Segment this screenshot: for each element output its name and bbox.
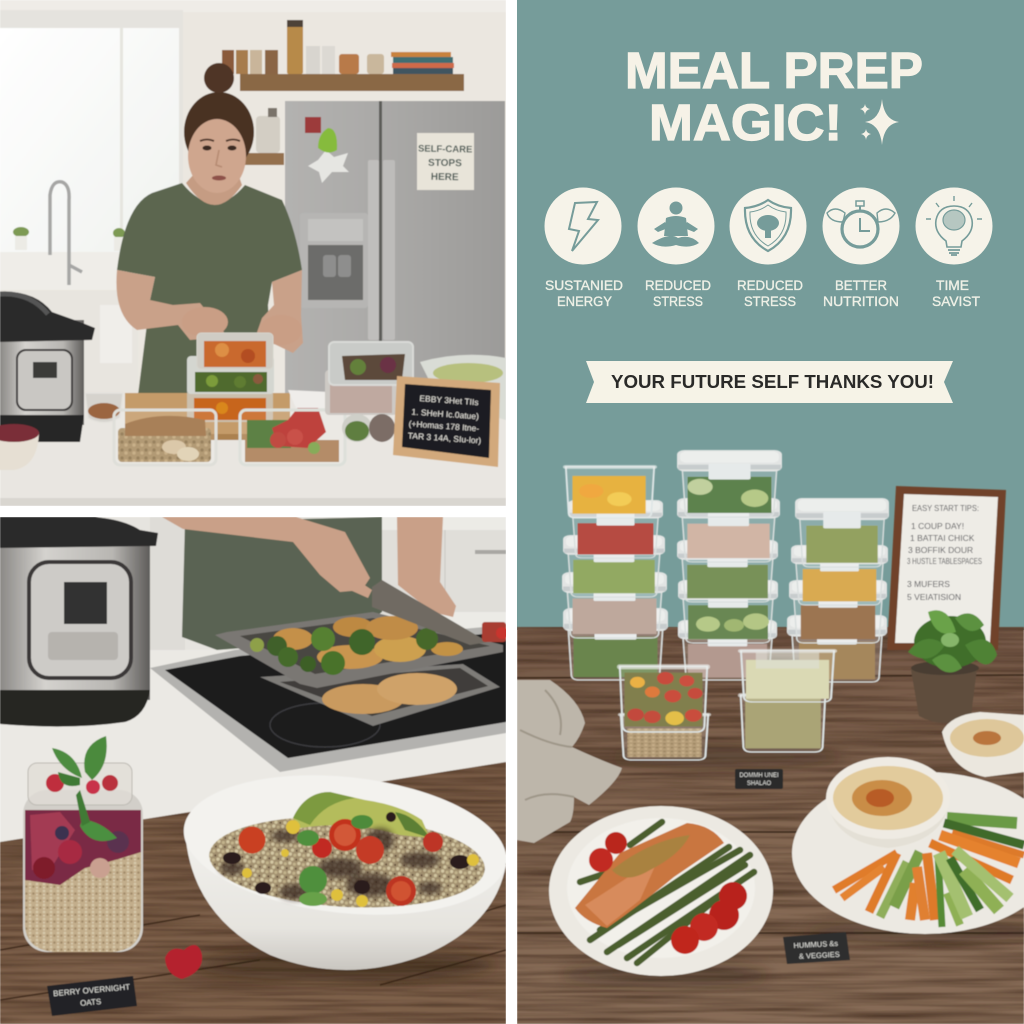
burner rings	[270, 703, 380, 747]
label: hummus and veggies: & VEGGIES	[799, 950, 840, 961]
cabinets	[150, 517, 506, 657]
label: hummus and veggies: HUMMUS &s	[793, 939, 839, 950]
overnight oats jar	[23, 736, 143, 952]
label: chicken salad	[735, 769, 783, 789]
title: MEAL PREP	[625, 42, 923, 99]
benefit: sustained energy: SUSTANIED	[545, 278, 623, 293]
table shadow under bowl and jar	[195, 949, 495, 981]
icon: winged stopwatch	[827, 201, 895, 247]
chalkboard sign: 1. SHeH Ic.0atue)	[411, 407, 479, 421]
icon: sparkles	[860, 99, 899, 145]
linen towel	[517, 680, 622, 843]
benefit: reduced stress shield: STRESS	[744, 294, 796, 309]
container: grains and chicken	[114, 410, 216, 465]
upper sheet pan with chicken and broccoli	[215, 612, 503, 688]
windowsill plants	[13, 227, 125, 251]
potted basil plant	[908, 610, 997, 723]
fridge	[285, 101, 505, 396]
icon: light bulb with brain	[926, 196, 982, 255]
whiteboard tips sign: 3 HUSTLE TABLESPACES	[907, 556, 982, 566]
shadow under containers and plates	[560, 747, 1024, 987]
faucet	[50, 182, 82, 285]
whiteboard tips sign	[887, 486, 1006, 650]
icon: shield with broccoli	[745, 200, 791, 251]
fridge note: self-care starts here: HERE	[431, 172, 459, 183]
whiteboard tips sign: 3 MUFERS	[907, 579, 950, 589]
benefit: reduced stress: STRESS	[653, 294, 703, 309]
wooden table top	[517, 627, 1024, 1024]
label: berry overnight oats: OATS	[80, 997, 102, 1008]
whiteboard tips sign: 1 COUP DAY!	[911, 521, 964, 531]
title	[625, 42, 923, 151]
panel: meal prep magic poster	[517, 0, 1024, 630]
panel gutters	[0, 0, 517, 1024]
shelf with jars and books	[222, 20, 464, 91]
person with knife	[162, 517, 456, 650]
icon: meditating person	[652, 202, 699, 247]
kitchen counter	[0, 395, 506, 506]
panel: woman prepping meals in kitchen	[0, 0, 506, 506]
back containers	[288, 342, 506, 442]
benefit: reduced stress: REDUCED	[645, 278, 711, 293]
veggie plate with hummus	[792, 757, 1024, 934]
stack of containers: left	[562, 465, 668, 680]
label: hummus and veggies	[783, 932, 850, 964]
chalkboard sign: TAR 3 14A, SIu-lor)	[407, 430, 482, 446]
chef knife	[345, 572, 488, 645]
stacked containers on board	[187, 333, 274, 422]
ribbon banner	[586, 361, 953, 403]
bowl of berries and small dish	[0, 393, 123, 470]
benefit: sustained energy: ENERGY	[557, 294, 612, 309]
grain salad bowl	[177, 760, 513, 970]
salmon plate	[549, 806, 773, 976]
induction cooktop	[150, 625, 506, 772]
strawberry	[165, 945, 202, 979]
benefit: better nutrition: NUTRITION	[823, 294, 899, 309]
benefit: reduced stress	[638, 188, 714, 309]
label: berry overnight oats	[47, 976, 137, 1016]
label: chicken salad: SHALAO	[747, 781, 772, 787]
label: chicken salad: DOMMH UNEI	[739, 773, 779, 779]
whiteboard tips sign: 5 VEIATISION	[907, 592, 961, 602]
container: salad with peppers	[240, 405, 345, 465]
benefit: sustained energy	[544, 188, 623, 309]
title: MAGIC!	[649, 94, 842, 151]
fridge note: self-care starts here	[417, 133, 474, 190]
benefit: better nutrition	[822, 188, 900, 309]
chalkboard sign: (+Homas 178 Itne-	[408, 418, 480, 433]
label: berry overnight oats: BERRY OVERNIGHT	[53, 982, 130, 998]
small shelf with jar	[243, 108, 284, 165]
icon: lightning bolt	[569, 202, 598, 251]
fridge magnet: star note	[305, 117, 349, 183]
benefit: reduced stress shield: REDUCED	[737, 278, 803, 293]
benefit: reduced stress shield	[730, 188, 806, 309]
fridge note: self-care starts here: STOPS	[428, 158, 462, 169]
whiteboard tips sign: 1 BATTAI CHICK	[910, 533, 975, 543]
whiteboard tips sign: EASY START TIPS:	[912, 503, 979, 513]
slaw containers	[738, 649, 837, 752]
lower sheet pan	[260, 664, 500, 726]
chalkboard sign	[393, 376, 500, 467]
woman	[116, 63, 303, 395]
benefit: time savist: SAVIST	[932, 294, 980, 309]
whiteboard tips sign: 3 BOFFIK DOUR	[908, 545, 973, 555]
tomatoes at edge of stove	[482, 622, 508, 642]
benefit: better nutrition: BETTER	[835, 278, 887, 293]
pressure cooker	[0, 292, 95, 442]
small hummus bowl	[942, 712, 1024, 777]
stack of containers: right	[787, 498, 889, 682]
window	[0, 10, 183, 395]
stack of containers: middle	[677, 450, 782, 680]
panel: batch cooking and finished meals	[0, 517, 513, 1024]
chalkboard sign: EBBY 3Het TIIs	[419, 393, 479, 407]
pressure cooker	[0, 517, 158, 727]
ribbon banner: YOUR FUTURE SELF THANKS YOU!	[611, 371, 934, 392]
fridge note: self-care starts here: SELF-CARE	[418, 144, 472, 155]
tomato and grain container	[617, 664, 711, 760]
scene: containers and plated meals on wooden table	[517, 450, 1024, 1024]
benefit: time savist: TIME	[936, 278, 969, 293]
benefit: time savist	[916, 188, 992, 309]
wooden table	[0, 762, 506, 1024]
